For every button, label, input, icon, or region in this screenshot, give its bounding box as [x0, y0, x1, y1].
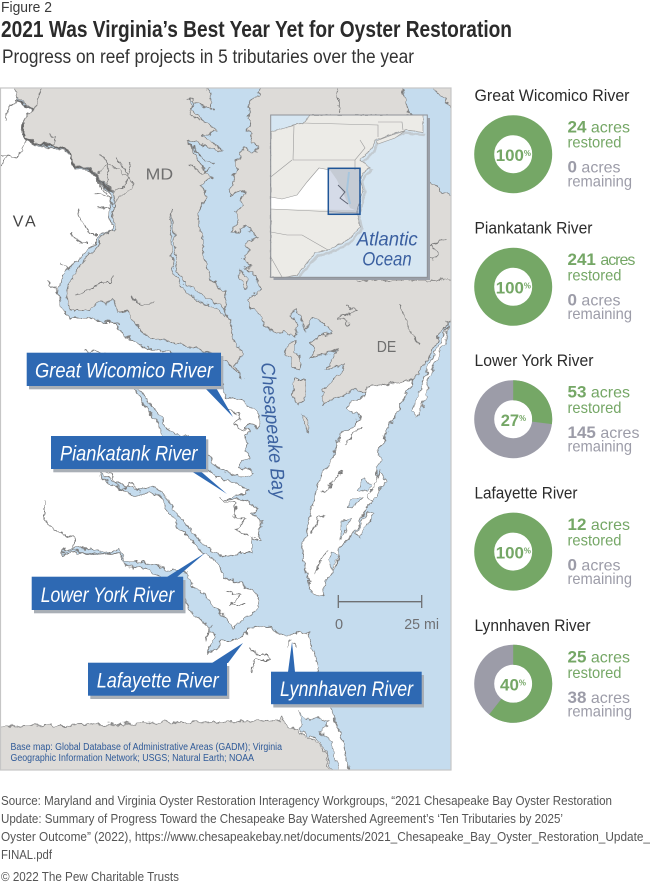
- leader: Great Wicomico River: [203, 386, 233, 417]
- donut: 100% restored: [484, 523, 542, 581]
- water background: [0, 88, 451, 770]
- restored acres: 12 acres: [568, 515, 630, 534]
- remaining acres: 145 acres: [568, 423, 639, 442]
- inset land: [271, 115, 423, 277]
- inset label: Atlantic Ocean: Atlantic: [356, 230, 418, 251]
- land: barrier islands: [355, 325, 447, 538]
- label: Chesapeake Bay: Chesapeake Bay: [256, 362, 290, 501]
- inset shadow: [274, 118, 430, 280]
- map frame: [0, 88, 451, 770]
- inset frame: [271, 115, 427, 277]
- state label: VA: VA: [13, 214, 36, 231]
- scale bar: 0: [335, 617, 343, 633]
- panel: map of Chesapeake Bay: [0, 78, 462, 780]
- inset creeks: [338, 185, 348, 204]
- remaining acres: 0 acres: [568, 158, 621, 177]
- panel: Piankatank River: Piankatank River: [474, 218, 593, 238]
- callout: Piankatank River: [51, 436, 208, 472]
- state label: MD: MD: [146, 166, 173, 184]
- callout: Lynnhaven River: [271, 672, 424, 708]
- coastlines and land: [0, 78, 462, 780]
- donut: 40% label, 60% green: %: [519, 678, 526, 688]
- scale bar: [335, 595, 439, 633]
- callout: Piankatank River: Piankatank River: [60, 442, 198, 466]
- callout: Lower York River: [32, 577, 186, 613]
- donut: 100% restored: [484, 125, 542, 183]
- panel: Piankatank River: remaining: [568, 306, 632, 323]
- base map credit: [10, 742, 282, 764]
- panel: Great Wicomico River: restored: [568, 135, 622, 152]
- water: Patuxent River: [170, 208, 226, 316]
- source note: Update: Summary of Progress Toward the Chesapeake Bay Watershed Agreement’s ‘Ten Tributaries by 2025’: [1, 812, 563, 826]
- callout: Great Wicomico River: [27, 353, 223, 389]
- land: North Carolina: [0, 717, 332, 780]
- callout: Lower York River: Lower York River: [41, 584, 175, 607]
- inset Virginia highlight: [271, 168, 355, 210]
- land: Virginia western shore: [0, 78, 349, 780]
- panel: Lafayette River: restored: [568, 532, 622, 549]
- land: Eastern Shore of Virginia: [303, 380, 413, 597]
- base map credit: Geographic Information Network; USGS; Natural Earth; NOAA: [10, 753, 254, 764]
- panel: Lynnhaven River: remaining: [568, 704, 632, 720]
- remaining acres: 0 acres: [568, 556, 621, 574]
- subtitle: Progress on reef projects in 5 tributaries over the year: [2, 47, 415, 68]
- panel: Lower York River: [474, 351, 639, 456]
- panel: Lynnhaven River: restored: [568, 665, 622, 682]
- leader: Piankatank River: [188, 469, 227, 494]
- remaining acres: 0 acres: [568, 290, 621, 309]
- donut: 27% restored: 27: [501, 411, 520, 430]
- panel: Lafayette River: Lafayette River: [474, 484, 578, 502]
- panel: Lynnhaven River: Lynnhaven River: [474, 616, 591, 635]
- restored acres: 25 acres: [568, 648, 630, 666]
- restored acres: 24 acres: [568, 117, 630, 136]
- donut: 100% restored: 100: [496, 279, 524, 298]
- land: Eastern Shore of Maryland and Delaware: [229, 78, 462, 405]
- panel: Great Wicomico River: [474, 86, 632, 190]
- panel: Lafayette River: [474, 484, 632, 588]
- land: Maryland western shore: [14, 78, 242, 378]
- donut: 100% restored: 100: [496, 146, 524, 165]
- donut: 27% restored: %: [519, 414, 526, 423]
- restored acres: 53 acres: [568, 382, 630, 402]
- panel: Lower York River: restored: [568, 400, 622, 417]
- inset Long Island: [376, 131, 405, 144]
- callout: Great Wicomico River: Great Wicomico River: [35, 360, 214, 382]
- callout: Lafayette River: [88, 663, 229, 699]
- title: 2021 Was Virginia’s Best Year Yet for Oyster Restoration: [1, 16, 512, 42]
- leader: Lower York River: [167, 553, 205, 577]
- inset bay: [347, 172, 350, 204]
- state label: DE: DE: [377, 339, 396, 356]
- panel: Lower York River: remaining: [568, 438, 632, 456]
- land: bay islands: [238, 270, 309, 432]
- donut: 100% restored: %: [524, 546, 531, 555]
- panel: Lower York River: Lower York River: [474, 351, 594, 370]
- donut: 27% restored: [484, 390, 542, 448]
- remaining acres: 38 acres: [568, 688, 630, 707]
- donut: 40% label, 60% green: [484, 655, 542, 713]
- panel: Piankatank River: [474, 218, 635, 323]
- panel: Great Wicomico River: remaining: [568, 174, 632, 190]
- leader: Lynnhaven River: [288, 642, 295, 672]
- donut: 40% label, 60% green: 40: [500, 676, 519, 694]
- source note: Source: Maryland and Virginia Oyster Restoration Interagency Workgroups, “2021 Chesapeake Bay Oyster Restoration: [1, 794, 612, 808]
- leader: Lafayette River: [212, 643, 243, 663]
- donut: 100% restored: %: [524, 149, 531, 158]
- source note: [1, 794, 650, 862]
- callout: Lafayette River: Lafayette River: [97, 670, 220, 692]
- land: New Jersey corner: [430, 78, 462, 114]
- inset focus rectangle: [328, 168, 360, 214]
- donut: 100% restored: 100: [496, 543, 524, 562]
- callout: Lynnhaven River: Lynnhaven River: [280, 678, 414, 701]
- inset state lines: [271, 122, 403, 277]
- inset coast shadow: [299, 133, 425, 277]
- figure number: Figure 2: [1, 0, 52, 16]
- inset water: [271, 115, 427, 277]
- donut: 100% restored: [484, 258, 542, 316]
- panel: Piankatank River: restored: [568, 267, 622, 284]
- panel: Lafayette River: remaining: [568, 571, 632, 588]
- inset locator map: [271, 115, 430, 280]
- inset label: Atlantic Ocean: [356, 230, 418, 271]
- panel: Great Wicomico River: Great Wicomico River: [474, 86, 630, 105]
- source note: FINAL.pdf: [1, 848, 52, 862]
- water: Eastern Shore lagoons: [328, 480, 370, 570]
- scale bar: 25 mi: [404, 617, 439, 633]
- water: Currituck sound: [298, 712, 342, 780]
- panel: Lynnhaven River: [474, 616, 632, 720]
- base map credit: Base map: Global Database of Administrative Areas (GADM); Virginia: [10, 742, 282, 753]
- restored acres: 241 acres: [568, 250, 635, 269]
- donut: 100% restored: %: [524, 282, 531, 291]
- rivers and creeks: [0, 88, 451, 672]
- inset label: Atlantic Ocean: Ocean: [362, 250, 412, 271]
